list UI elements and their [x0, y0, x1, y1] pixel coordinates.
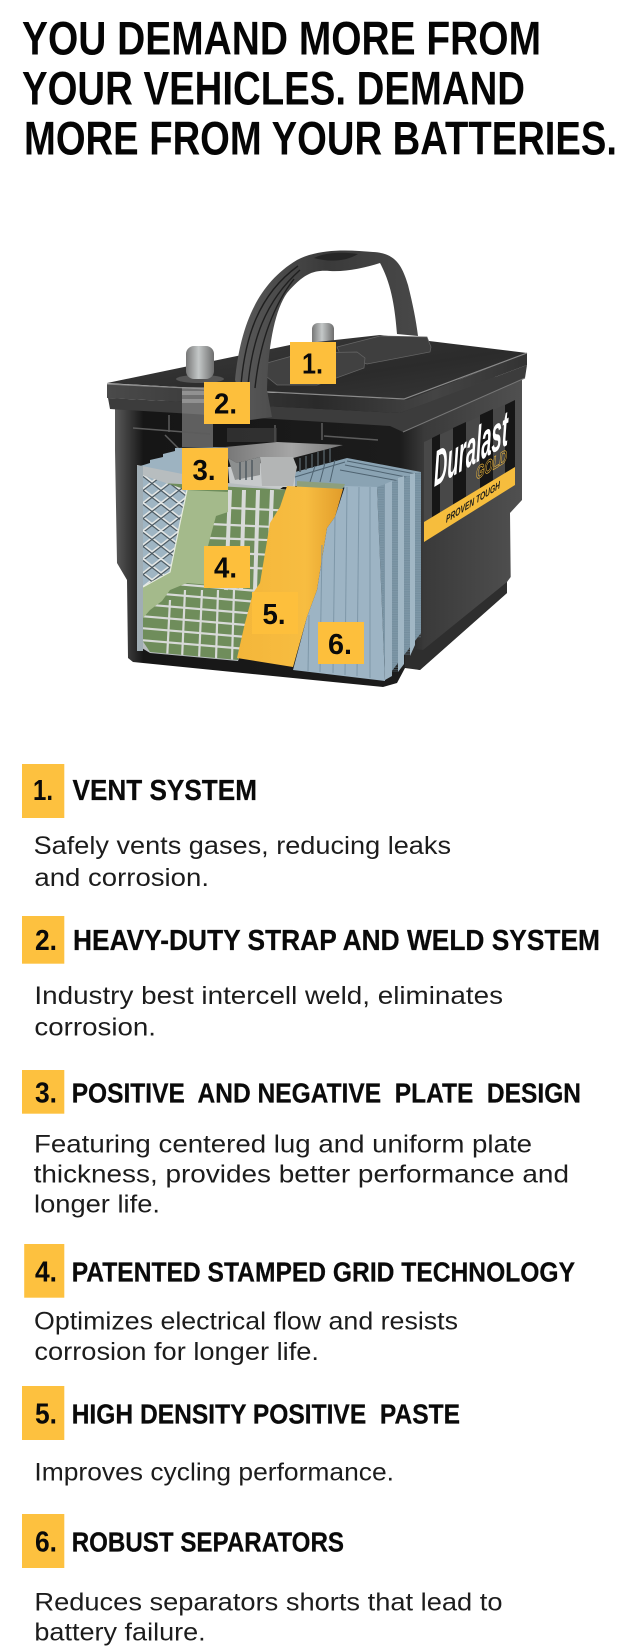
number badge 2: 2. [35, 925, 57, 957]
callout badge 4 [204, 546, 250, 588]
description 4: corrosion for longer life. [34, 1338, 319, 1366]
duralast label: GOLD [476, 446, 507, 485]
description 2: corrosion. [34, 1014, 156, 1042]
number badge 4: 4. [35, 1257, 57, 1289]
duralast label [424, 399, 515, 542]
interior ribs [133, 415, 378, 450]
number badge 5: 5. [35, 1399, 57, 1431]
battery case body [115, 375, 522, 687]
lid lip [108, 365, 527, 432]
title: YOU DEMAND MORE FROM [22, 12, 541, 64]
heading 4: PATENTED STAMPED GRID TECHNOLOGY [72, 1257, 575, 1288]
connector strap casting [215, 442, 343, 496]
heading 5: HIGH DENSITY POSITIVE PASTE [72, 1399, 460, 1430]
description 3: Featuring centered lug and uniform plate [34, 1130, 532, 1158]
infographic canvas: Duralast [434, 399, 509, 498]
description 2: Industry best intercell weld, eliminates [34, 982, 503, 1010]
description 6: Reduces separators shorts that lead to [34, 1589, 503, 1617]
description 3 [34, 1130, 569, 1218]
icon: front terminal post [176, 346, 224, 447]
callout badge 1: 1. [302, 348, 323, 380]
callout badge 6: 6. [328, 629, 352, 661]
callout badge 2: 2. [214, 388, 237, 420]
callout badge 3 [182, 448, 228, 490]
lid top face [107, 335, 527, 400]
positive and negative plate with stamped grid [137, 465, 295, 665]
feature 5: positive paste [22, 1386, 460, 1486]
feature 2: strap and weld [22, 916, 600, 1042]
number badge 1: 1. [33, 775, 53, 807]
description 4: Optimizes electrical flow and resists [34, 1307, 458, 1335]
callout badge 3: 3. [192, 455, 216, 487]
number badge 6: 6. [35, 1526, 57, 1558]
heading 6: ROBUST SEPARATORS [72, 1526, 344, 1557]
callout badge 1 [290, 342, 336, 384]
number badge 5 [22, 1386, 64, 1440]
feature 4: stamped grid [24, 1244, 575, 1366]
callout badge 6 [318, 622, 364, 664]
case lower ledge [405, 582, 507, 670]
heading 1: VENT SYSTEM [72, 775, 257, 807]
callout badge 2 [204, 382, 250, 424]
callout badge 5: 5. [262, 599, 286, 631]
description 2 [34, 982, 503, 1042]
feature 1: vent system [22, 764, 451, 892]
description 3: thickness, provides better performance and [34, 1161, 569, 1189]
carrying strap [235, 250, 418, 420]
callout badge 5 [252, 592, 298, 634]
vent caps [267, 336, 431, 385]
number badge 3: 3. [35, 1077, 57, 1109]
number badge 2 [22, 916, 64, 964]
number badge 3 [22, 1070, 64, 1114]
description 6 [34, 1589, 503, 1647]
description 1: Safely vents gases, reducing leaks [34, 832, 451, 860]
description 1: and corrosion. [34, 864, 209, 892]
description 4 [34, 1307, 458, 1366]
duralast label: PROVEN TOUGH [446, 480, 500, 526]
title: YOUR VEHICLES. DEMAND [22, 62, 525, 114]
battery cutaway illustration [107, 250, 527, 687]
heading 3: POSITIVE AND NEGATIVE PLATE DESIGN [72, 1077, 581, 1108]
callout badge 4: 4. [214, 552, 237, 584]
number badge 1 [22, 764, 64, 818]
heading 2: HEAVY-DUTY STRAP AND WELD SYSTEM [73, 925, 600, 957]
number badge 4 [24, 1244, 64, 1298]
title [22, 12, 617, 164]
description 1 [34, 832, 451, 892]
high density positive paste [237, 486, 343, 667]
number badge 6 [22, 1514, 64, 1568]
separator front sheet [293, 486, 385, 681]
icon: rear terminal post [312, 323, 334, 349]
separator stack behind plates [137, 447, 421, 680]
description 3: longer life. [34, 1190, 160, 1218]
feature 6: separators [22, 1514, 502, 1647]
description 5: Improves cycling performance. [34, 1458, 394, 1486]
description 6: battery failure. [34, 1619, 206, 1647]
lid side face [107, 353, 527, 413]
feature 3: plate design [22, 1070, 581, 1218]
